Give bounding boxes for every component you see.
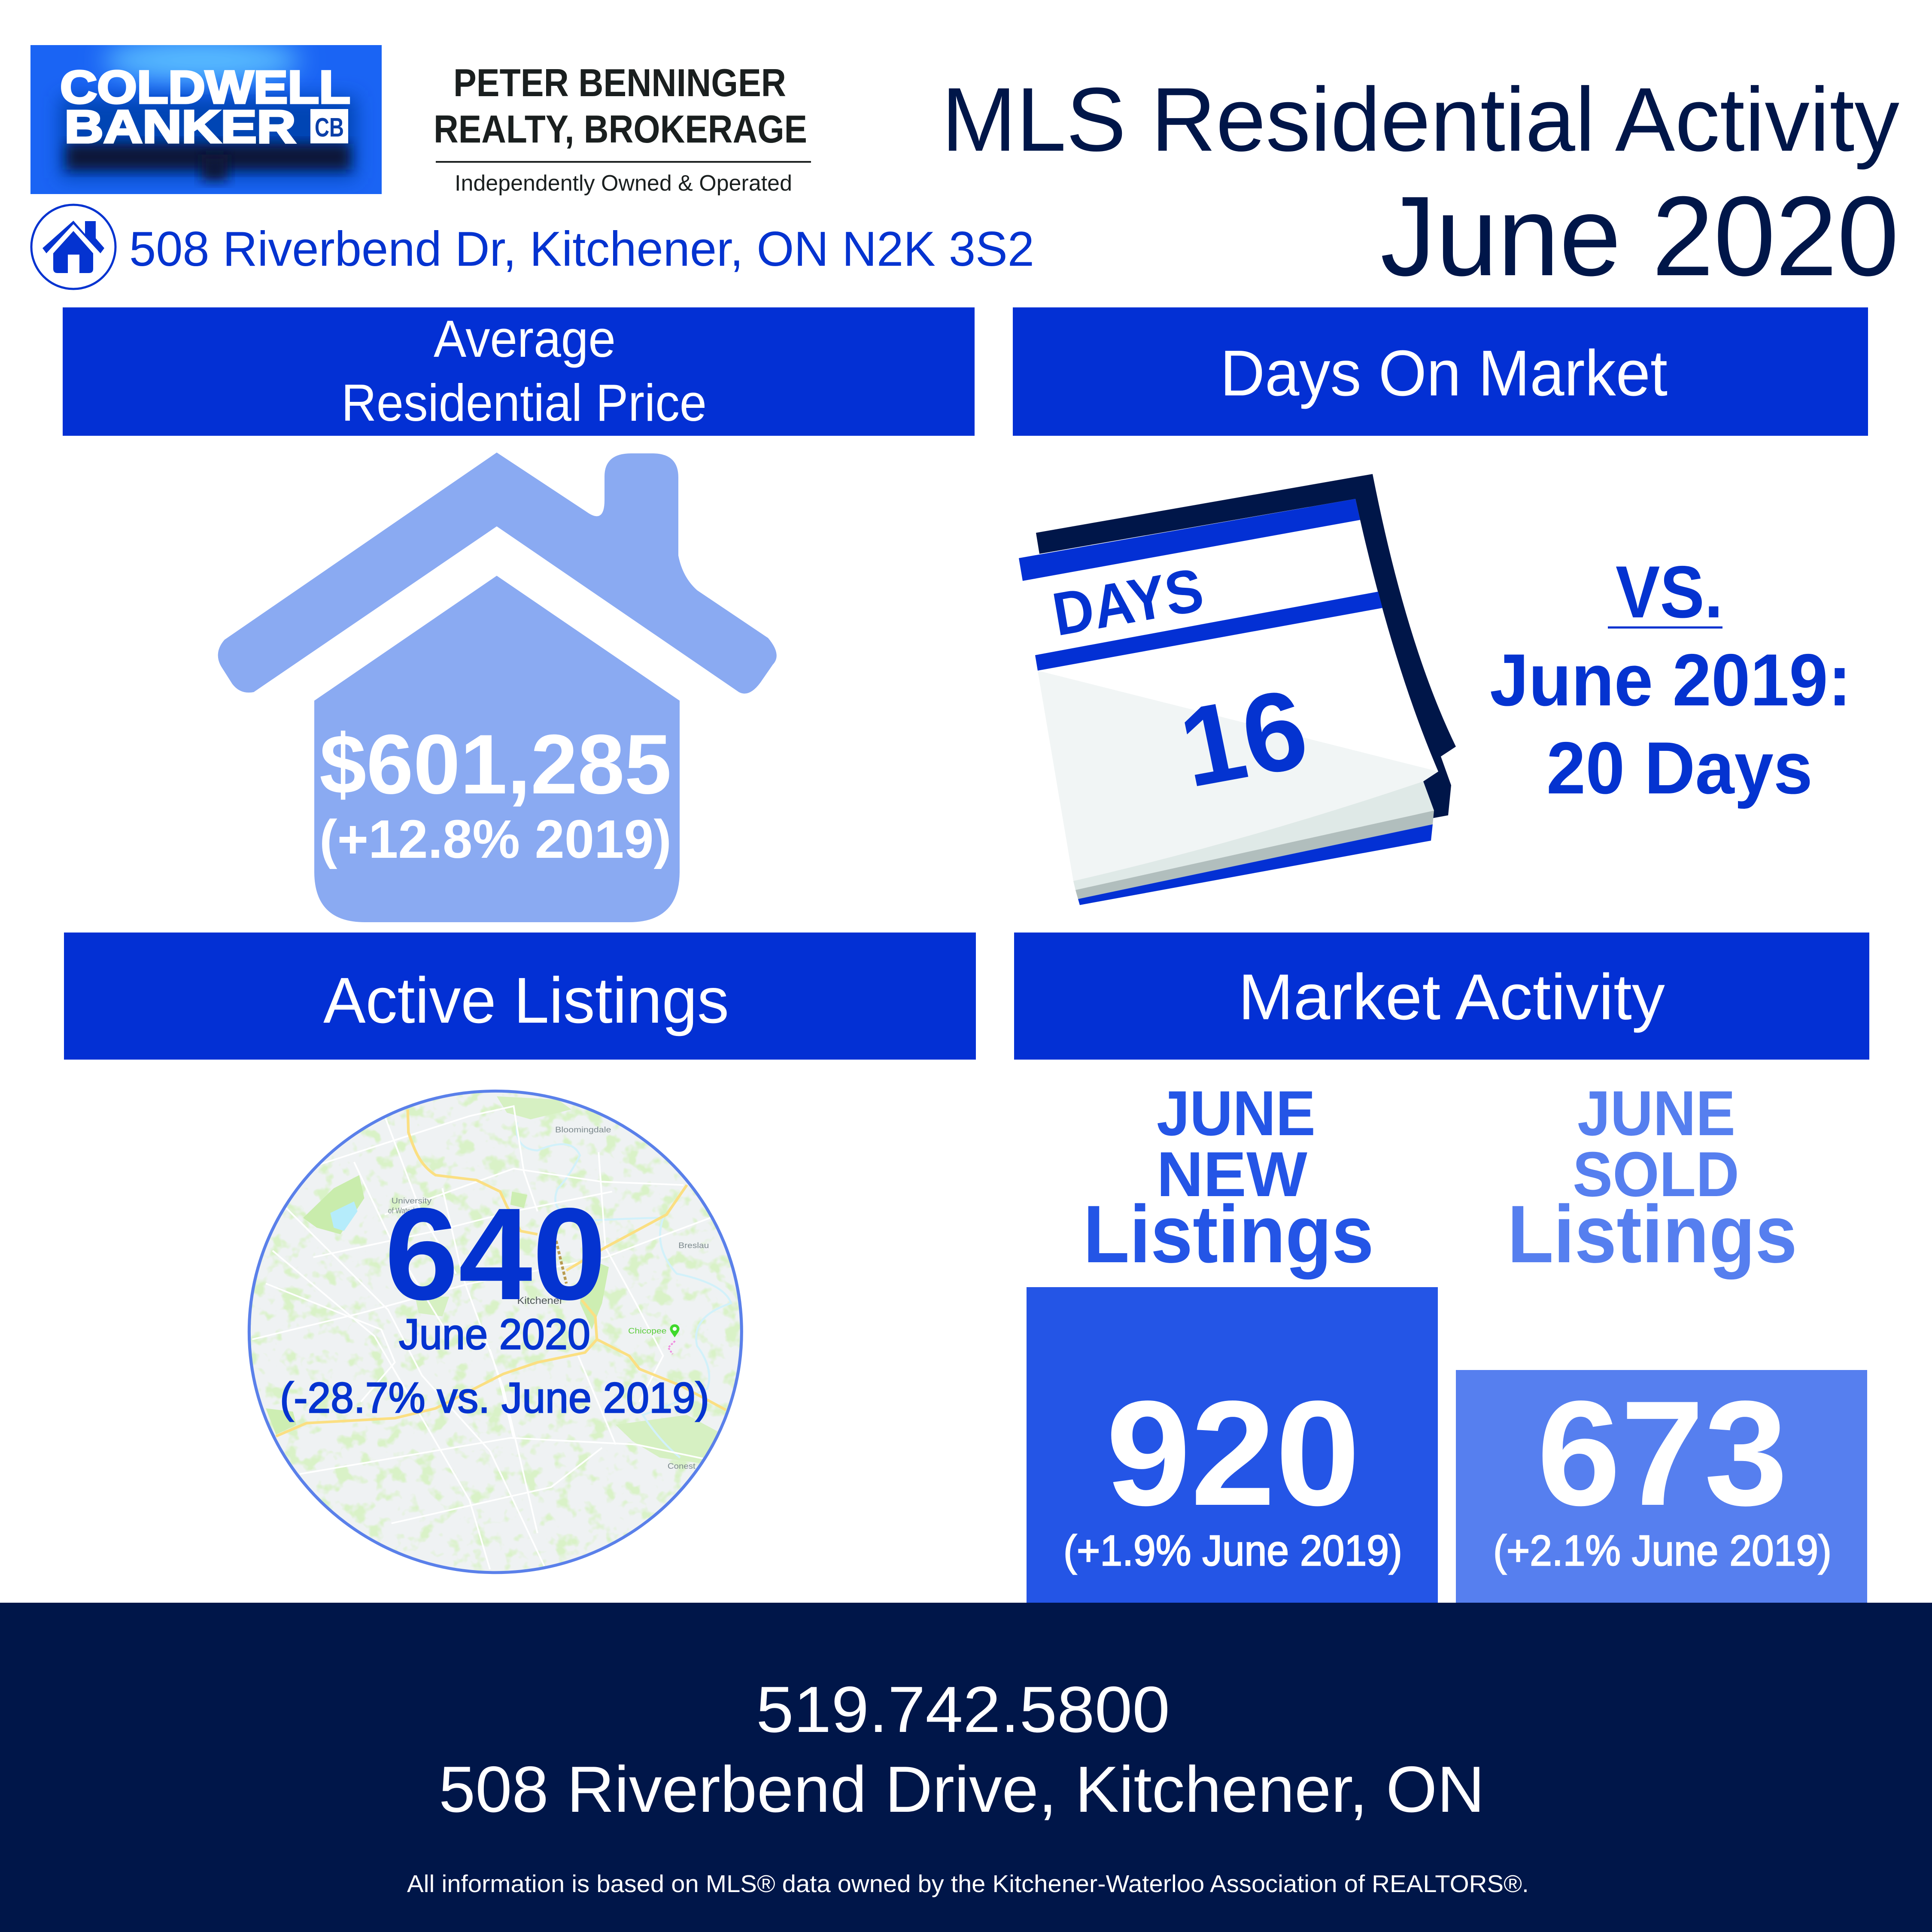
map land cover [251, 1093, 740, 1571]
heading: June sold listings: SOLD [1573, 1139, 1739, 1210]
panel header: average residential price [63, 307, 975, 436]
map border [249, 1091, 741, 1573]
brokerage name block: Independently Owned & Operated [455, 171, 792, 196]
map labels: Breslau [678, 1241, 709, 1250]
map labels [388, 1125, 709, 1470]
comparison: vs June 2019: June 2019: [1490, 639, 1851, 721]
value: sold listings: 673 [1537, 1370, 1788, 1537]
icon: house with average price [218, 453, 777, 922]
logo: Coldwell Banker: CB [315, 113, 344, 143]
panel header: active listings: Active Listings [323, 964, 729, 1036]
logo: Coldwell Banker: COLDWELL [60, 61, 350, 113]
icon: calendar with 16 days: 16 [1170, 665, 1317, 811]
map labels: Conest [668, 1461, 696, 1470]
change: new listings: (+1.9% June 2019) [1063, 1527, 1402, 1575]
comparison: vs June 2019: 20 Days [1546, 727, 1813, 809]
brokerage name block [434, 61, 811, 196]
footer panel [0, 1603, 1932, 1932]
map labels: of Waterloo [388, 1206, 422, 1215]
footer phone number: 519.742.5800 [756, 1673, 1170, 1746]
logo: Coldwell Banker [30, 39, 382, 194]
value: new listings: 920 [1106, 1370, 1360, 1537]
footer address: 508 Riverbend Drive, Kitchener, ON [439, 1753, 1485, 1826]
map labels: Kitchener [517, 1295, 563, 1306]
icon: calendar with 16 days [1019, 474, 1456, 905]
average price change: (+12.8% 2019) [319, 809, 671, 869]
bar: new listings [1027, 1287, 1438, 1603]
heading: June sold listings: Listings [1507, 1189, 1797, 1280]
active listings period: June 2020 [399, 1310, 590, 1358]
panel header: days on market: Days On Market [1220, 337, 1668, 409]
panel header: days on market [1013, 307, 1868, 436]
comparison: vs June 2019 [1490, 551, 1851, 809]
panel header: average residential price: Residential Price [341, 374, 707, 432]
active listings change: (-28.7% vs. June 2019) [280, 1374, 709, 1422]
heading: June new listings: JUNE [1157, 1078, 1315, 1149]
map labels: University [392, 1196, 432, 1205]
icon: calendar with 16 days: DAYS [1048, 556, 1208, 649]
office address: 508 Riverbend Dr, Kitchener, ON N2K 3S2 [129, 222, 1034, 276]
map circle with active listings [247, 1090, 743, 1574]
map labels: Chicopee [628, 1326, 666, 1335]
heading: June sold listings: JUNE [1577, 1078, 1735, 1149]
heading: June sold listings [1507, 1078, 1797, 1280]
footer disclaimer: All information is based on MLS® data owned by the Kitchener-Waterloo Association of REALTORS®. [407, 1870, 1529, 1898]
bar: sold listings [1456, 1370, 1867, 1603]
title [942, 69, 1899, 299]
comparison: vs June 2019: VS. [1616, 551, 1723, 633]
heading: June new listings: Listings [1083, 1189, 1374, 1280]
column: June new listings [1027, 1078, 1438, 1603]
change: sold listings: (+2.1% June 2019) [1493, 1527, 1832, 1575]
heading: June new listings [1083, 1078, 1374, 1280]
map labels: Bloomingdale [555, 1125, 611, 1134]
panel header: average residential price: Average [434, 310, 616, 368]
brokerage name block: PETER BENNINGER [453, 61, 786, 105]
average price value: $601,285 [319, 717, 671, 811]
panel header: market activity: Market Activity [1238, 960, 1665, 1033]
panel header: active listings [64, 933, 976, 1060]
column: June sold listings [1456, 1078, 1867, 1603]
brokerage name block: REALTY, BROKERAGE [434, 108, 807, 151]
title: MLS Residential Activity [942, 69, 1899, 170]
panel header: market activity [1014, 933, 1869, 1060]
icon: home in circle [31, 205, 115, 289]
title: June 2020 [1380, 173, 1899, 299]
heading: June new listings: NEW [1157, 1139, 1307, 1210]
active listings value: 640 [385, 1181, 606, 1327]
map highways [276, 1109, 726, 1436]
map water [330, 1201, 358, 1231]
logo: Coldwell Banker: BANKER [64, 100, 296, 152]
map streets [252, 1106, 728, 1569]
